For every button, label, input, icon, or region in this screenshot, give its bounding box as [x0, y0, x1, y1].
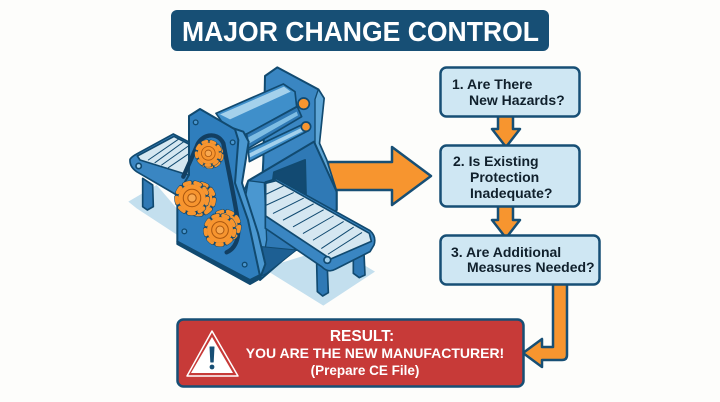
step 2 box	[440, 146, 580, 206]
illustration: machine with conveyor	[128, 67, 375, 306]
right conveyor	[265, 179, 375, 296]
front side plate	[177, 109, 265, 284]
floor shadow	[128, 185, 375, 306]
drive belt	[183, 135, 238, 252]
step 1 box: New Hazards?	[469, 92, 565, 108]
title banner: MAJOR CHANGE CONTROL	[182, 16, 539, 47]
result text: (Prepare CE File)	[311, 363, 419, 378]
icon: warning triangle	[187, 331, 238, 376]
arrow: machine to questions	[328, 147, 431, 205]
machine body and opening	[243, 142, 337, 280]
step 2 box: Inadequate?	[470, 185, 552, 201]
step 2 box: 2. Is Existing	[453, 153, 539, 169]
step 3 box: Measures Needed?	[467, 259, 595, 275]
step 1 box: 1. Are There	[452, 76, 533, 92]
result text: RESULT:	[330, 328, 394, 345]
step 1 box	[440, 68, 580, 116]
step 3 box	[440, 236, 600, 284]
result panel	[178, 320, 524, 386]
step 3 box: 3. Are Additional	[451, 244, 561, 260]
arrow: step 2 to step 3	[492, 206, 520, 238]
result text: YOU ARE THE NEW MANUFACTURER!	[246, 345, 504, 361]
step 2 box: Protection	[470, 169, 539, 185]
arrow: step 3 to result	[523, 284, 567, 367]
bolts	[182, 120, 247, 267]
left conveyor	[130, 134, 192, 210]
gears	[177, 141, 239, 245]
rollers	[216, 84, 311, 162]
arrow: step 1 to step 2	[492, 116, 520, 147]
back plate	[260, 67, 337, 250]
